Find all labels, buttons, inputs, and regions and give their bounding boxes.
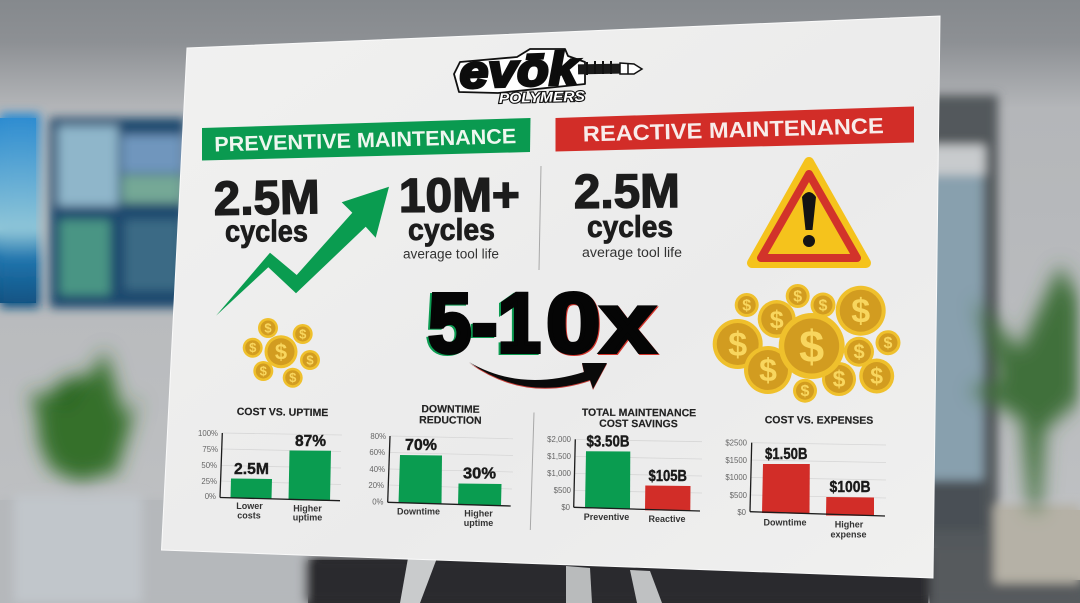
curved arrow [469,362,607,389]
logo: evok polymers [454,42,642,106]
chart: cost vs expenses: $2500 [725,438,748,448]
chart: total maintenance cost savings: Preventive [584,512,629,522]
chart: cost vs uptime: costs [237,510,261,520]
chart: cost vs uptime: 75% [202,445,218,454]
icon: large coin pile: $ [770,306,784,334]
chart: downtime reduction: Higher [464,508,493,518]
chart: downtime reduction: 30% [463,466,496,482]
icon: large coin pile: $ [728,326,747,364]
icon: large coin pile: $ [799,321,824,372]
icon: small coin pile: $ [289,370,297,385]
icon: large coin pile: $ [853,342,865,364]
heading: reactive maintenance: REACTIVE MAINTENANCE [582,113,884,146]
icon: small coin pile: $ [306,352,314,368]
logo: evok polymers: evōk [459,42,581,98]
growth arrow [216,187,389,316]
multiplier: 5-10x [428,276,655,370]
chart title: COST SAVINGS [599,418,678,430]
bars [398,455,502,506]
chart: downtime reduction: 40% [369,465,385,474]
chart: cost vs expenses: $1500 [725,456,748,465]
icon: large coin pile: $ [833,366,846,392]
drill bit [578,61,642,75]
chart: downtime reduction: 60% [369,448,385,457]
chart: cost vs expenses [725,414,886,539]
chart: cost vs uptime [198,406,342,522]
chart: total maintenance cost savings: $0 [561,503,571,512]
bars [230,450,331,501]
reactive: 2.5M cycles: average tool life [582,245,682,260]
preventive target: 10M+ cycles: 10M+ [399,169,520,223]
icon: small coin pile: $ [260,364,268,378]
preventive target: 10M+ cycles: average tool life [403,246,499,262]
easel legs [400,558,662,603]
chart: total maintenance cost savings: Reactive [648,514,686,524]
chart: total maintenance cost savings: $1,500 [547,452,572,461]
chart title: DOWNTIME [421,403,480,416]
icon: large coin pile: $ [742,298,751,314]
reactive: 2.5M cycles [574,165,682,260]
chart: cost vs uptime: 50% [201,461,217,470]
chart: cost vs uptime: uptime [293,512,322,522]
preventive start: 2.5M cycles: 2.5M [213,171,320,226]
logo: evok polymers: POLYMERS [499,88,586,106]
icon: large coin pile: $ [819,298,828,314]
chart title: COST VS. UPTIME [237,406,328,419]
icon: large coin pile: $ [793,288,802,306]
chart title: REDUCTION [419,414,482,427]
chart: cost vs uptime: 0% [205,492,216,501]
chart: downtime reduction: Downtime [397,506,440,516]
chart: cost vs uptime: Lower [236,501,263,511]
chart: cost vs expenses: $1000 [725,473,748,482]
chart: cost vs expenses: expense [830,529,867,539]
reactive: 2.5M cycles: 2.5M [574,165,680,219]
bars [585,451,690,511]
reactive: 2.5M cycles: cycles [587,209,673,244]
multiplier: 5-10x: 5-1 [428,276,541,370]
chart: downtime reduction: uptime [464,518,493,528]
chart: total maintenance cost savings: $105B [648,468,687,485]
chart: downtime reduction: 20% [368,481,384,490]
icon: small coin pile: $ [299,326,307,342]
chart: cost vs uptime: 2.5M [234,461,269,478]
icon: small coin pile: $ [249,340,257,355]
icon: large coin pile: $ [851,293,870,331]
chart: downtime reduction: 0% [372,498,384,506]
preventive start: 2.5M cycles: cycles [225,214,308,248]
chart: cost vs uptime: Higher [293,504,322,514]
heading: preventive maintenance: PREVENTIVE MAINTENANCE [214,125,517,156]
chart: downtime reduction: 80% [370,432,386,441]
chart: cost vs expenses: $500 [730,491,748,500]
chart: cost vs expenses: $1.50B [765,446,808,463]
chart: cost vs expenses: $100B [830,479,870,496]
icon: large coin pile: $ [870,363,883,389]
heading: preventive maintenance [202,118,530,160]
chart: downtime reduction [368,403,513,528]
chart: total maintenance cost savings: $2,000 [547,435,572,444]
chart: total maintenance cost savings: $1,000 [547,469,572,478]
chart: total maintenance cost savings: $3.50B [586,434,630,451]
icon: small coin pile: $ [275,340,287,364]
preventive target: 10M+ cycles [399,169,520,262]
chart title: COST VS. EXPENSES [765,414,873,427]
chart: cost vs expenses: Downtime [763,518,807,528]
icon: small coin pile [243,318,320,388]
icon: large coin pile: $ [801,383,810,400]
icon: large coin pile [713,284,900,403]
icon: warning triangle [752,162,866,263]
chart: cost vs expenses: $0 [737,508,747,517]
chart: downtime reduction: 70% [405,437,437,454]
icon: large coin pile: $ [884,335,893,352]
icon: small coin pile: $ [264,320,272,336]
poster board [162,16,940,578]
chart: cost vs uptime: 25% [201,477,217,486]
bars [762,464,874,516]
icon: large coin pile: $ [759,352,777,388]
chart: total maintenance cost savings: $500 [554,486,572,495]
heading: reactive maintenance [556,106,914,152]
multiplier: 5-10x: 0x [546,276,655,370]
preventive target: 10M+ cycles: cycles [408,212,495,247]
chart: cost vs expenses: Higher [835,520,864,530]
chart title: TOTAL MAINTENANCE [582,407,696,419]
chart: cost vs uptime: 100% [198,429,218,438]
chart: total maintenance cost savings [547,407,702,524]
chart: cost vs uptime: 87% [295,433,326,450]
